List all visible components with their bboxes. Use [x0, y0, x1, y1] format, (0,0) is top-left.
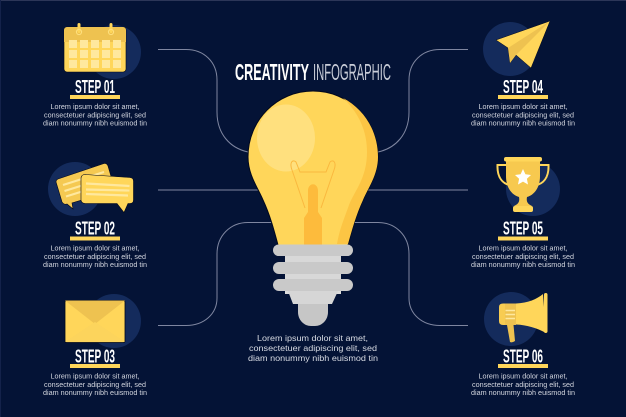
step 06 — [471, 292, 575, 397]
heading: STEP 03 — [75, 346, 115, 366]
central text: Lorem ipsum dolor sit amet, — [257, 333, 368, 343]
screw base — [273, 244, 353, 326]
bulb glass — [248, 91, 378, 245]
central text — [248, 333, 378, 363]
step 02 — [43, 162, 147, 269]
step 04 — [471, 21, 575, 128]
heading: STEP 06 — [503, 346, 543, 366]
description — [43, 104, 147, 128]
description: diam nonummy nibh euismod tin — [471, 262, 575, 269]
icon: trophy — [497, 157, 560, 216]
description: consectetuer adipiscing elit, sed — [44, 382, 146, 389]
description: diam nonummy nibh euismod tin — [43, 120, 147, 128]
description: diam nonummy nibh euismod tin — [471, 120, 575, 128]
underline — [70, 236, 120, 240]
description: Lorem ipsum dolor sit amet, — [50, 104, 140, 111]
underline — [70, 95, 120, 99]
description: diam nonummy nibh euismod tin — [43, 390, 147, 397]
description: diam nonummy nibh euismod tin — [43, 262, 147, 269]
title: CREATIVITY — [235, 59, 309, 85]
icon: envelope — [65, 294, 141, 348]
light bulb — [248, 91, 378, 326]
bulb shade — [337, 98, 378, 244]
description: diam nonummy nibh euismod tin — [471, 390, 575, 397]
bulb highlight — [257, 104, 315, 172]
description — [43, 246, 147, 269]
description — [471, 246, 575, 269]
heading: STEP 04 — [503, 77, 543, 97]
description: Lorem ipsum dolor sit amet, — [478, 246, 568, 252]
description: consectetuer adipiscing elit, sed — [472, 382, 574, 389]
underline — [498, 95, 548, 99]
description — [471, 104, 575, 128]
description: consectetuer adipiscing elit, sed — [472, 254, 574, 261]
step 01 — [43, 23, 147, 128]
step 03 — [43, 294, 147, 397]
description: consectetuer adipiscing elit, sed — [44, 112, 146, 120]
infographic canvas: INFOGRAPHIC — [313, 59, 391, 85]
description: Lorem ipsum dolor sit amet, — [478, 374, 568, 380]
underline — [498, 236, 548, 240]
central text: diam nonummy nibh euismod tin — [248, 353, 378, 363]
icon: speech bubbles — [48, 162, 134, 216]
icon: calendar — [64, 23, 141, 79]
description — [43, 374, 147, 397]
description: Lorem ipsum dolor sit amet, — [50, 246, 140, 252]
icon: megaphone — [484, 292, 548, 346]
step 05 — [471, 157, 575, 269]
description: consectetuer adipiscing elit, sed — [44, 254, 146, 261]
underline — [498, 364, 548, 368]
heading: STEP 02 — [75, 218, 115, 238]
description: consectetuer adipiscing elit, sed — [472, 112, 574, 120]
heading: STEP 01 — [75, 77, 115, 97]
connector lines — [158, 50, 468, 326]
icon: paper plane — [483, 21, 550, 76]
description: Lorem ipsum dolor sit amet, — [50, 374, 140, 380]
underline — [70, 364, 120, 368]
central text: consectetuer adipiscing elit, sed — [249, 343, 377, 353]
heading: STEP 05 — [503, 218, 543, 238]
filament — [291, 161, 335, 245]
description — [471, 374, 575, 397]
description: Lorem ipsum dolor sit amet, — [478, 104, 568, 111]
